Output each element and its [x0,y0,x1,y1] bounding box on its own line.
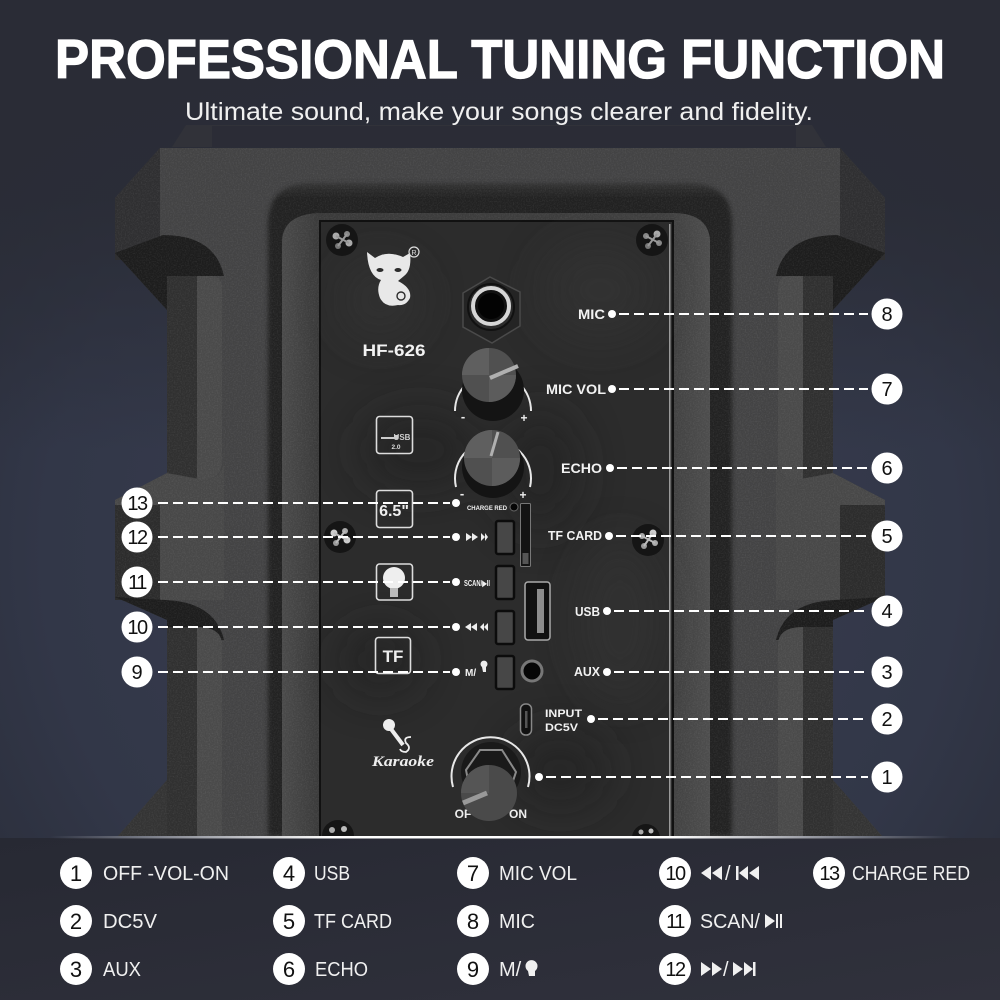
panel plate [320,221,673,837]
charge led [510,503,518,511]
recess around panel [268,183,732,836]
screw top left [326,224,358,256]
callout numbers: 3 [881,662,893,684]
legend item 10: / [725,863,731,885]
legend item 13: CHARGE RED [852,863,970,885]
speaker body [115,125,885,838]
microphone jack [463,277,520,343]
panel labels: ECHO [561,460,602,476]
legend item 11 [659,905,782,937]
tf badge [376,638,410,674]
panel labels: INPUT [545,708,582,720]
callout numbers: 5 [881,526,893,548]
screw bottom right [632,824,660,852]
panel labels: USB [575,605,600,619]
panel labels: MIC VOL [546,381,606,397]
callout numbers: 9 [131,662,143,684]
legend item 9: 9 [467,957,479,982]
callout numbers [122,298,902,792]
legend item 13: 13 [819,863,840,885]
light badge [376,564,412,600]
callout numbers: 13 [127,493,148,515]
model label: HF-626 [362,341,426,360]
screw middle right [632,524,664,556]
panel rewind icon [465,623,488,631]
legend item 1 [60,857,229,889]
leader dots [452,310,616,781]
panel forward icon [466,533,488,541]
control panel [320,221,673,852]
legend item 4: 4 [283,861,295,886]
legend item 2: DC5V [103,911,158,933]
karaoke logo [371,719,435,770]
usb-c port [520,704,532,735]
legend item 6: 6 [283,957,295,982]
legend item 6 [273,953,368,985]
right side mouldings [776,148,885,836]
callout numbers: 11 [128,572,147,594]
echo knob: - [460,486,464,501]
legend item 5: TF CARD [314,911,392,933]
legend panel [0,836,1000,1000]
cabinet silhouette [115,148,885,836]
legend item 13 [813,857,970,889]
left side mouldings [115,148,224,836]
panel labels: TF CARD [548,529,602,543]
callout numbers: 8 [881,304,893,326]
power volume knob [451,737,530,821]
buttons [496,521,514,689]
panel bulb icon [480,661,488,672]
mic volume knob [455,348,531,425]
panel labels: AUX [574,665,601,679]
legend item 8: 8 [467,909,479,934]
panel edge highlight [669,224,670,836]
power volume knob: OF [455,807,471,821]
legend item 6: ECHO [315,959,368,981]
legend item 12: 12 [665,959,686,981]
legend item 11: SCAN/ [700,911,760,933]
usb port [525,582,550,640]
usb badge [376,416,412,454]
legend item 3: 3 [70,957,82,982]
legend item 9 [457,953,538,985]
6.5 inch badge: 6.5" [379,503,409,520]
power volume knob: ON [509,807,527,821]
callout numbers: 4 [881,601,893,623]
callout numbers: 6 [881,458,893,480]
panel labels: M/ [465,668,476,679]
usb badge: 2.0 [391,444,401,451]
speaker top handle [172,125,826,147]
panel labels: SCAN/▶II [464,579,490,588]
screw middle left [324,521,356,553]
legend item 1: OFF -VOL-ON [103,863,229,885]
panel labels: CHARGE RED [467,505,507,512]
legend item 7: MIC VOL [499,863,577,885]
panel blotches [340,410,610,810]
legend rule [0,836,1000,838]
panel labels [464,306,606,734]
panel labels: DC5V [545,722,579,734]
mic volume knob: - [461,409,465,424]
screw bottom left [322,820,354,852]
karaoke logo: Karaoke [371,754,435,770]
cabinet texture [115,148,885,838]
legend item 9: M/ [499,959,522,981]
leader lines [158,314,868,777]
panel surround [282,213,710,836]
panel labels: MIC [578,306,605,322]
legend item 8: MIC [499,911,535,933]
callout numbers: 1 [881,767,893,789]
legend item 12: / [723,959,729,981]
legend item 3: AUX [103,959,141,981]
title: PROFESSIONAL TUNING FUNCTION [55,28,945,90]
cat logo: R [411,250,417,257]
legend item 10 [659,857,759,889]
legend item 1: 1 [70,861,82,886]
aux port [522,661,542,681]
mic volume knob: + [520,411,528,425]
callout numbers: 12 [127,527,148,549]
tf card slot [520,504,530,566]
subtitle: Ultimate sound, make your songs clearer and fidelity. [185,98,813,126]
legend item 4: USB [314,863,350,885]
callout numbers: 7 [881,379,893,401]
legend item 12 [659,953,756,985]
tf badge: TF [383,647,403,666]
legend item 4 [273,857,350,889]
legend item 5 [273,905,392,937]
legend item 7: 7 [467,861,479,886]
legend item 3 [60,953,141,985]
legend item 10: 10 [665,863,686,885]
echo knob [455,430,531,502]
callout numbers: 2 [881,709,893,731]
legend item 2: 2 [70,909,82,934]
legend item 5: 5 [283,909,295,934]
echo knob: + [519,488,527,502]
legend item 8 [457,905,535,937]
callout numbers: 10 [127,617,148,639]
cat logo [367,247,419,306]
usb badge: USB [394,433,411,442]
6.5 inch badge [376,490,412,528]
legend item 2 [60,905,158,937]
legend item 11: 11 [666,911,685,933]
legend item 7 [457,857,577,889]
screw top right [636,224,668,256]
